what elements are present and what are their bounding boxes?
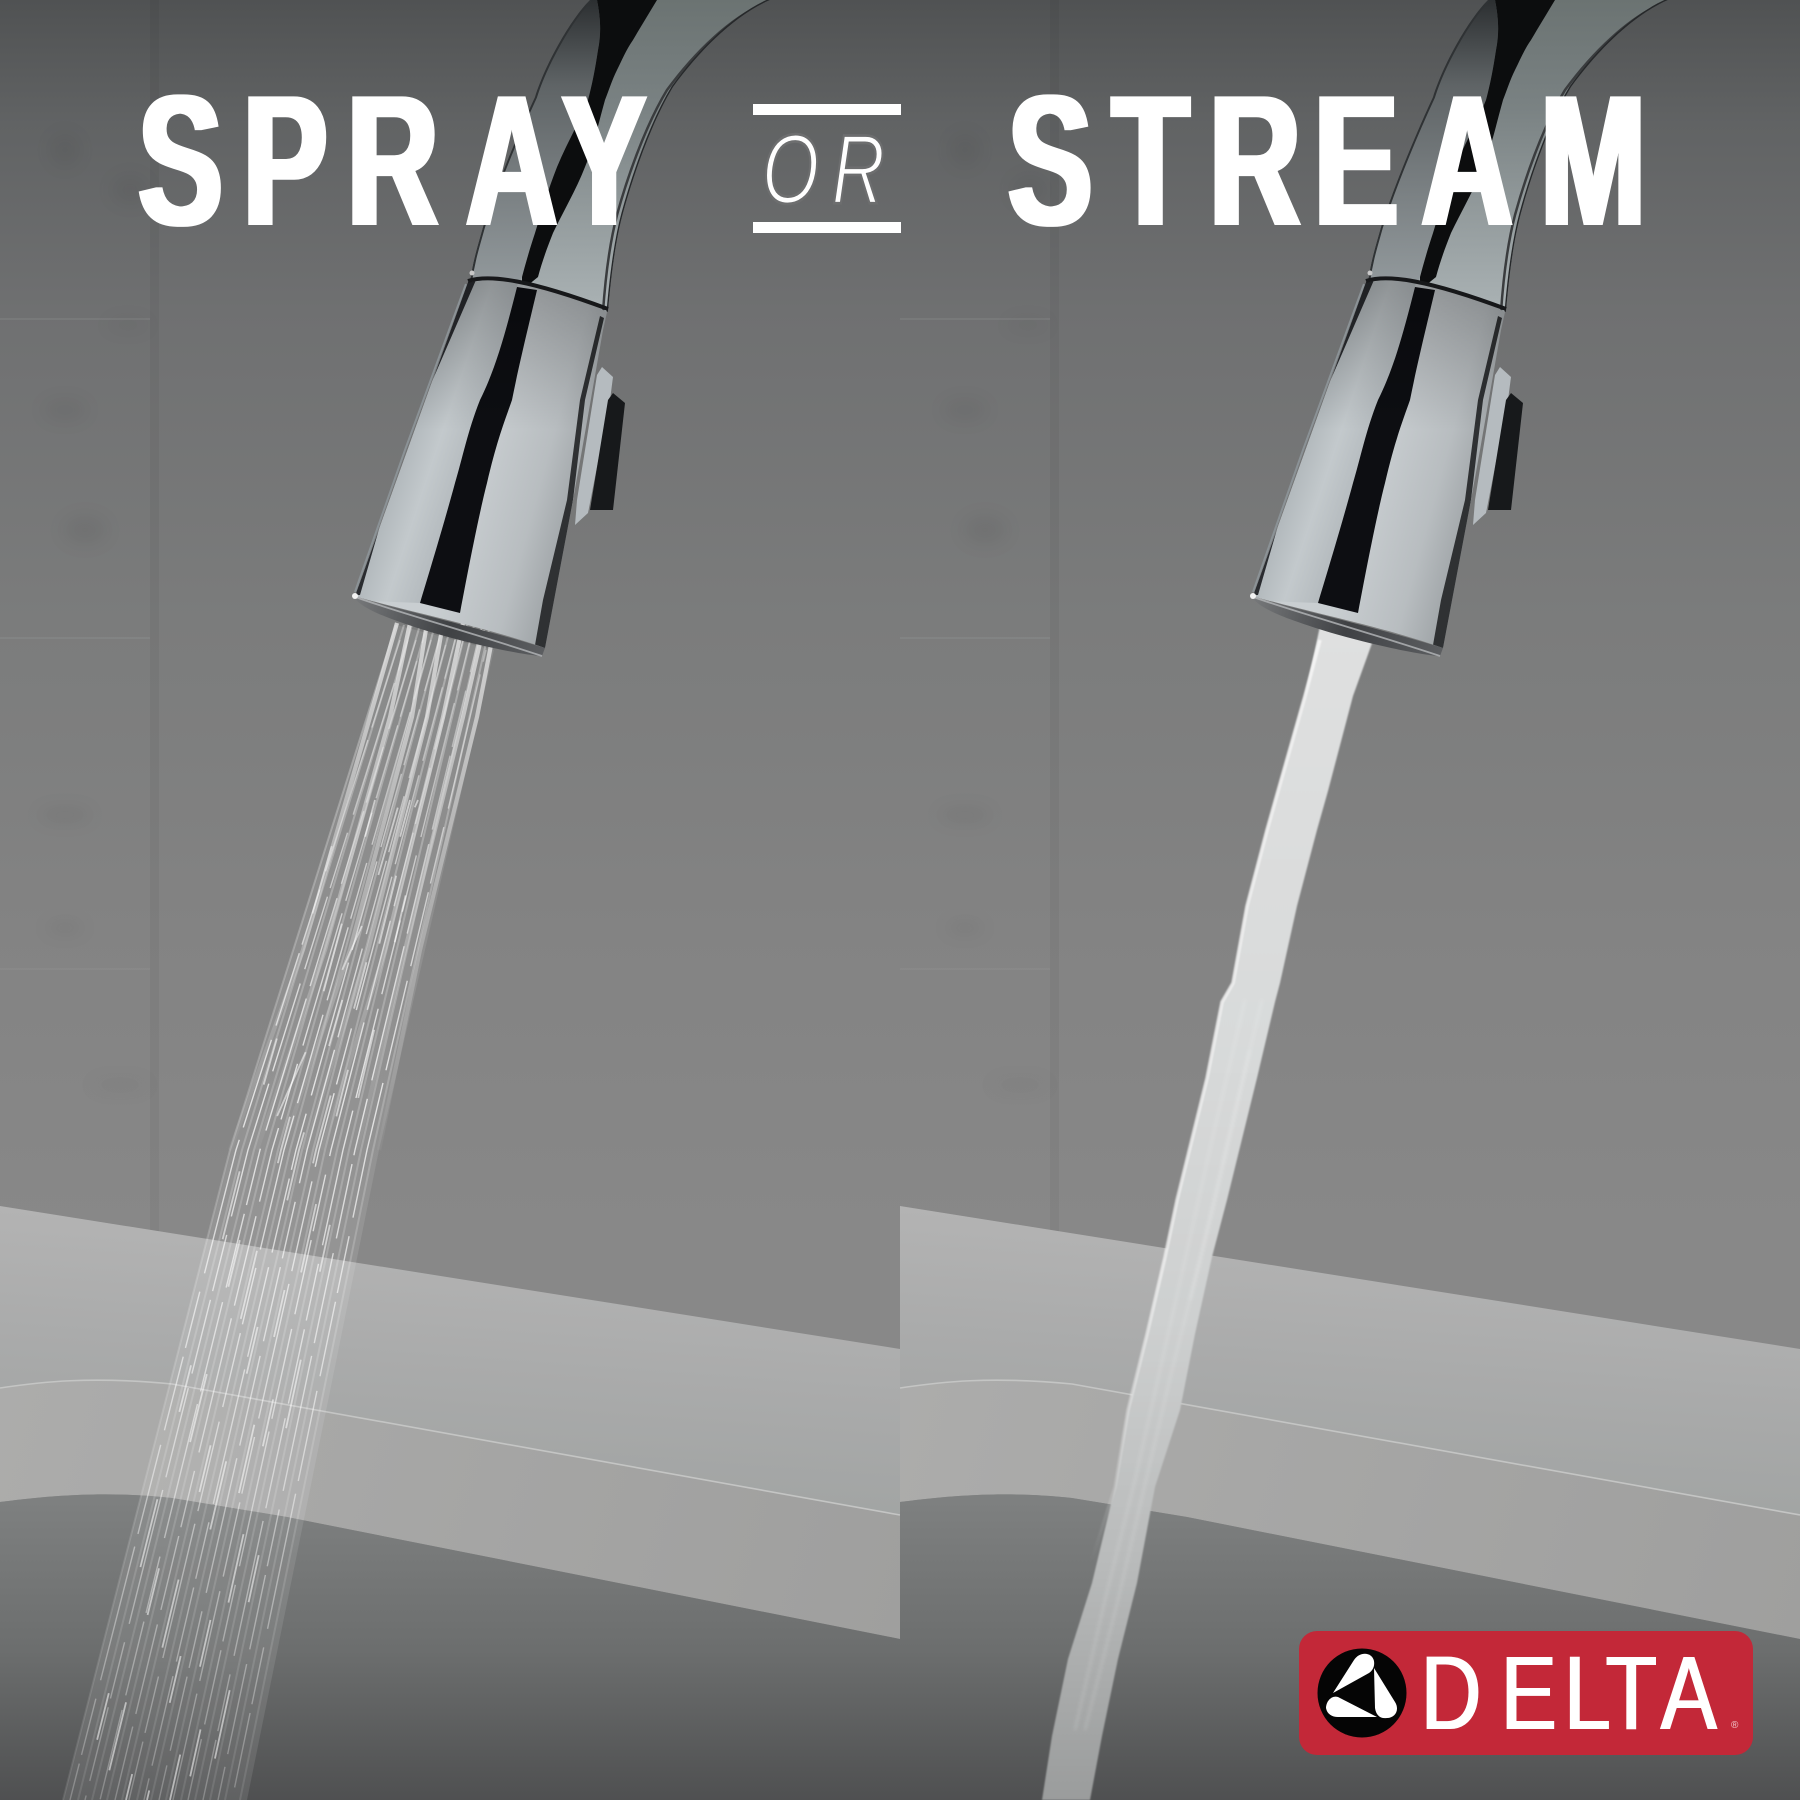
faucet: stream head	[1238, 0, 1678, 670]
icon: Delta triangle mark	[1318, 1648, 1406, 1738]
heading: SPRAY: SPRAY	[138, 55, 646, 265]
logo: Delta badge	[1299, 1631, 1753, 1755]
heading: OR with rules: OR	[762, 116, 885, 224]
panel: spray background scene	[0, 0, 900, 1800]
spray water	[63, 623, 494, 1800]
heading: STREAM: STREAM	[1008, 55, 1646, 265]
heading: OR with rules	[753, 104, 901, 233]
logo: Delta badge: DELTA	[1421, 1635, 1717, 1752]
stream water	[1042, 626, 1375, 1800]
faucet: spray head	[340, 0, 780, 670]
logo: Delta badge: ®	[1731, 1720, 1739, 1731]
panel: stream background scene	[900, 0, 1800, 1800]
